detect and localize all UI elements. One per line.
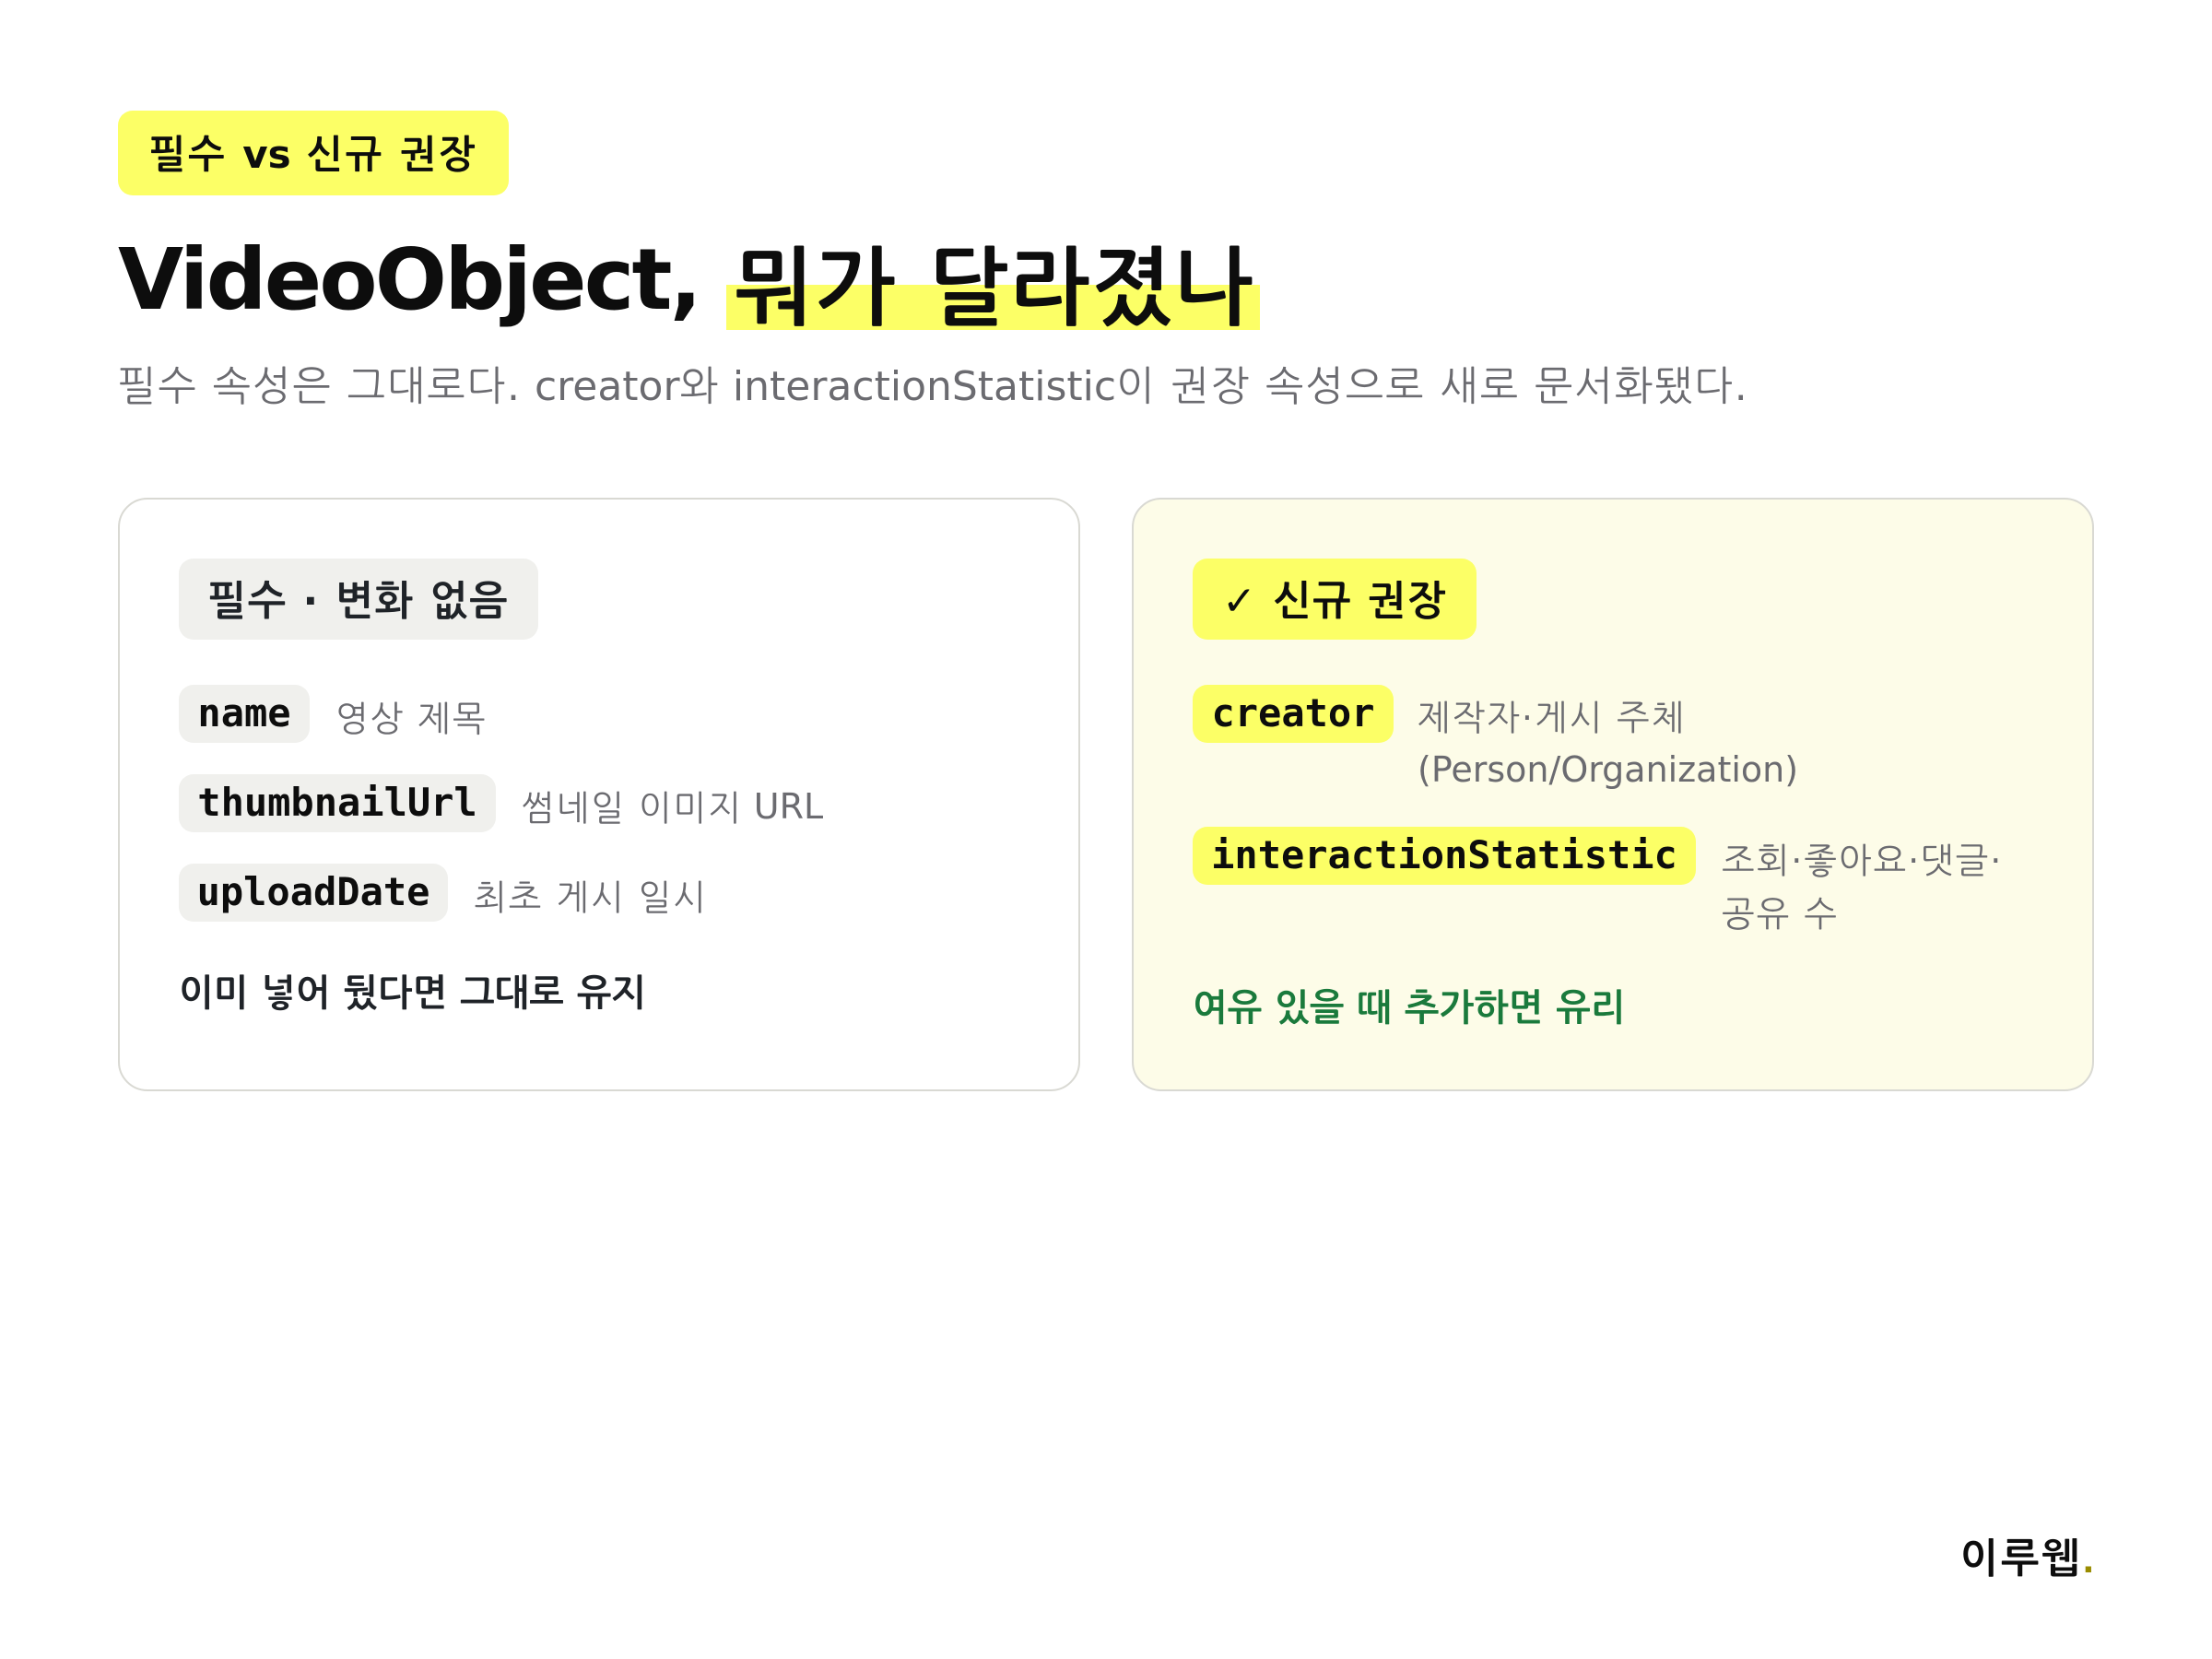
panel heading: required: 필수 · 변화 없음 (208, 578, 509, 625)
description: creator: (Person/Organization) (1418, 749, 1798, 790)
property: uploadDate (179, 864, 448, 922)
description: uploadDate: 최초 게시 일시 (474, 877, 708, 918)
description: thumbnailUrl: 썸네일 이미지 URL (522, 786, 823, 829)
title: VideoObject, 뭐가 달라졌나 (118, 230, 1254, 337)
property: creator: creator (1211, 690, 1375, 735)
property: creator (1193, 685, 1394, 743)
brand logo: 이루웹. (1960, 1536, 2094, 1582)
panel: new recommended (1132, 498, 2094, 1091)
description: creator (1418, 698, 1798, 790)
property: interactionStatistic: interactionStatistic (1211, 832, 1677, 877)
title highlight (726, 285, 1260, 330)
property: thumbnailUrl: thumbnailUrl (197, 780, 477, 825)
category badge (118, 111, 509, 195)
subtitle: 필수 속성은 그대로다. creator와 interactionStatistic이 권장 속성으로 새로 문서화됐다. (118, 363, 1749, 410)
note: keep as is: 이미 넣어 뒀다면 그대로 유지 (179, 972, 646, 1015)
property: uploadDate: uploadDate (197, 869, 429, 914)
description: name: 영상 제목 (335, 699, 487, 739)
panel heading: required (179, 559, 538, 640)
category badge: 필수 vs 신규 권장 (149, 132, 477, 177)
property: name (179, 685, 310, 743)
panel heading: new recommended (1193, 559, 1477, 640)
property: name: name (197, 690, 291, 735)
description: creator: 제작자·게시 주체 (1418, 698, 1686, 738)
panel: required (118, 498, 1080, 1091)
note: add when possible: 여유 있을 때 추가하면 유리 (1193, 987, 1625, 1030)
property: thumbnailUrl (179, 774, 496, 832)
description: interactionStatistic (1722, 841, 2003, 935)
panel heading: new recommended: ✓ 신규 권장 (1222, 578, 1447, 625)
description: interactionStatistic: 조회·좋아요·댓글· (1722, 841, 2003, 881)
description: interactionStatistic: 공유 수 (1722, 894, 1839, 935)
